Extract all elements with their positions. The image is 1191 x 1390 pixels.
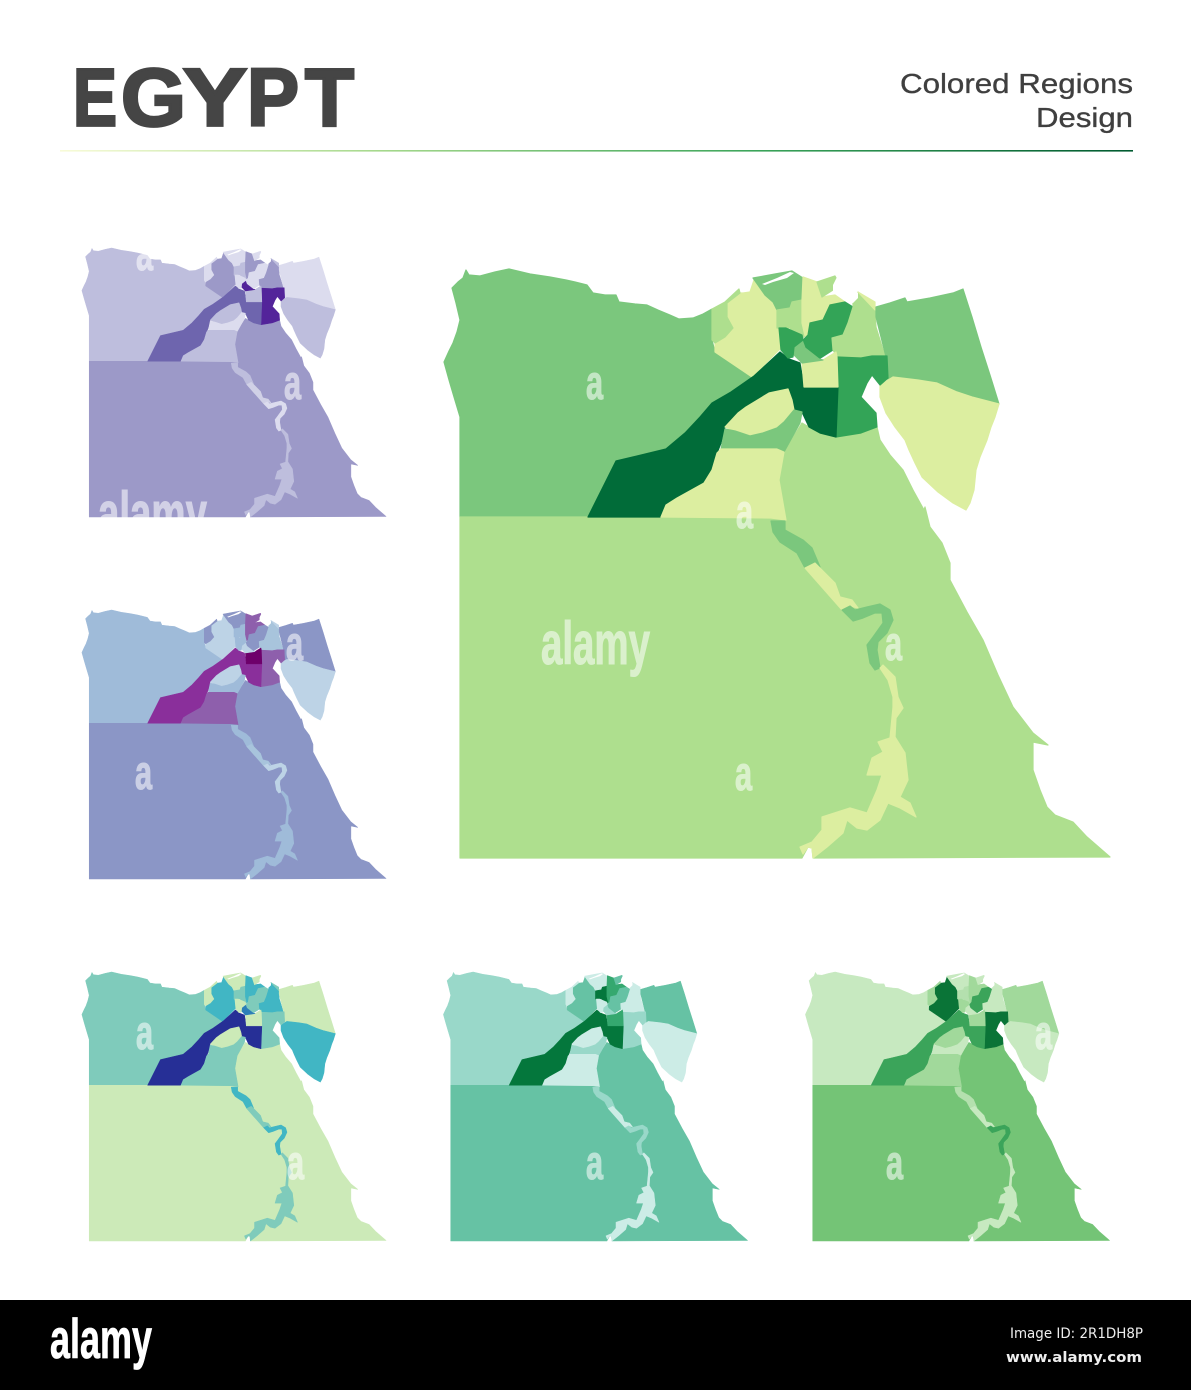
region: Faiyum (725, 389, 794, 436)
watermark: large map letters: a (586, 356, 604, 410)
watermark: sea-green map: a (586, 1136, 604, 1190)
region: Nile Aswan (800, 665, 916, 858)
region: Qalyubia (802, 352, 838, 387)
lagoon: Burullus (762, 272, 794, 285)
footer logo: alamy (50, 1307, 152, 1370)
subtitle: Design (1036, 102, 1133, 133)
watermark: purple map: a (136, 227, 154, 281)
watermark: green map (886, 1006, 1053, 1190)
region: Gharbia (777, 300, 805, 340)
regions of Egypt (444, 269, 1110, 858)
map: green palette (805, 972, 1110, 1241)
lagoon: Manzala (833, 277, 858, 303)
watermark: large map letters: a (735, 747, 753, 801)
watermark: blue-purple map (135, 617, 304, 800)
region: New Valley and Red Sea (460, 423, 1110, 858)
region: North Sinai (876, 289, 999, 404)
region: Minya (661, 449, 786, 520)
watermark: purple map: a (284, 356, 302, 410)
region: Giza and Cairo (588, 352, 838, 517)
header rule (60, 150, 1133, 152)
watermark: purple map: alamy (98, 480, 207, 547)
watermark: blue-purple map: a (286, 617, 304, 671)
region: Alexandria (712, 289, 740, 343)
watermark: blue-purple map: a (135, 746, 153, 800)
map: sea-green palette (443, 972, 748, 1241)
title: P (247, 53, 299, 144)
title: E (73, 53, 117, 144)
map: blue-purple palette (82, 610, 386, 879)
footer bar (0, 1300, 1191, 1390)
subtitle: Colored Regions (900, 68, 1133, 99)
title: G (121, 53, 186, 144)
watermark: large map letters: a (885, 617, 903, 671)
region: Suez and Ismailia (836, 356, 888, 437)
region: Dakahlia (803, 302, 853, 359)
title: T (305, 53, 354, 144)
region: Damietta west (802, 277, 845, 336)
region: Sharqia (832, 292, 885, 358)
watermark: alamy: alamy (541, 610, 650, 677)
region: Damietta (817, 276, 840, 297)
watermark: large map letters (586, 356, 903, 801)
region: Nile Sohag (805, 563, 858, 610)
region: Monufia south (794, 340, 823, 363)
watermark: green map: a (1035, 1006, 1053, 1060)
title: Y (183, 53, 247, 144)
watermark: purple map (98, 227, 302, 547)
region: Matruh (444, 269, 752, 517)
watermark: teal-blue map: a (136, 1006, 154, 1060)
region: Beheira (715, 280, 781, 377)
title (73, 53, 354, 144)
map: purple palette (82, 248, 386, 517)
map: teal-blue palette (82, 972, 386, 1241)
footer image id: Image ID: 2R1DH8P (1010, 1326, 1143, 1342)
footer url: www.alamy.com (1006, 1350, 1142, 1366)
subtitle (900, 68, 1133, 133)
watermark: green map: a (886, 1136, 904, 1190)
watermark: teal-blue map: a (287, 1136, 305, 1190)
watermark: large map letters: a (736, 485, 754, 539)
map: large Egypt (444, 269, 1110, 858)
region: Nile Qena (842, 604, 893, 670)
watermark: teal-blue map (136, 1006, 305, 1190)
region: South Sinai (880, 377, 999, 510)
region: Beni Suef (721, 410, 802, 452)
region: Kafr El Sheikh (753, 271, 803, 310)
region: Port Said (858, 292, 875, 310)
region: Monufia (779, 328, 803, 358)
region: Nile Assiut (771, 521, 820, 568)
